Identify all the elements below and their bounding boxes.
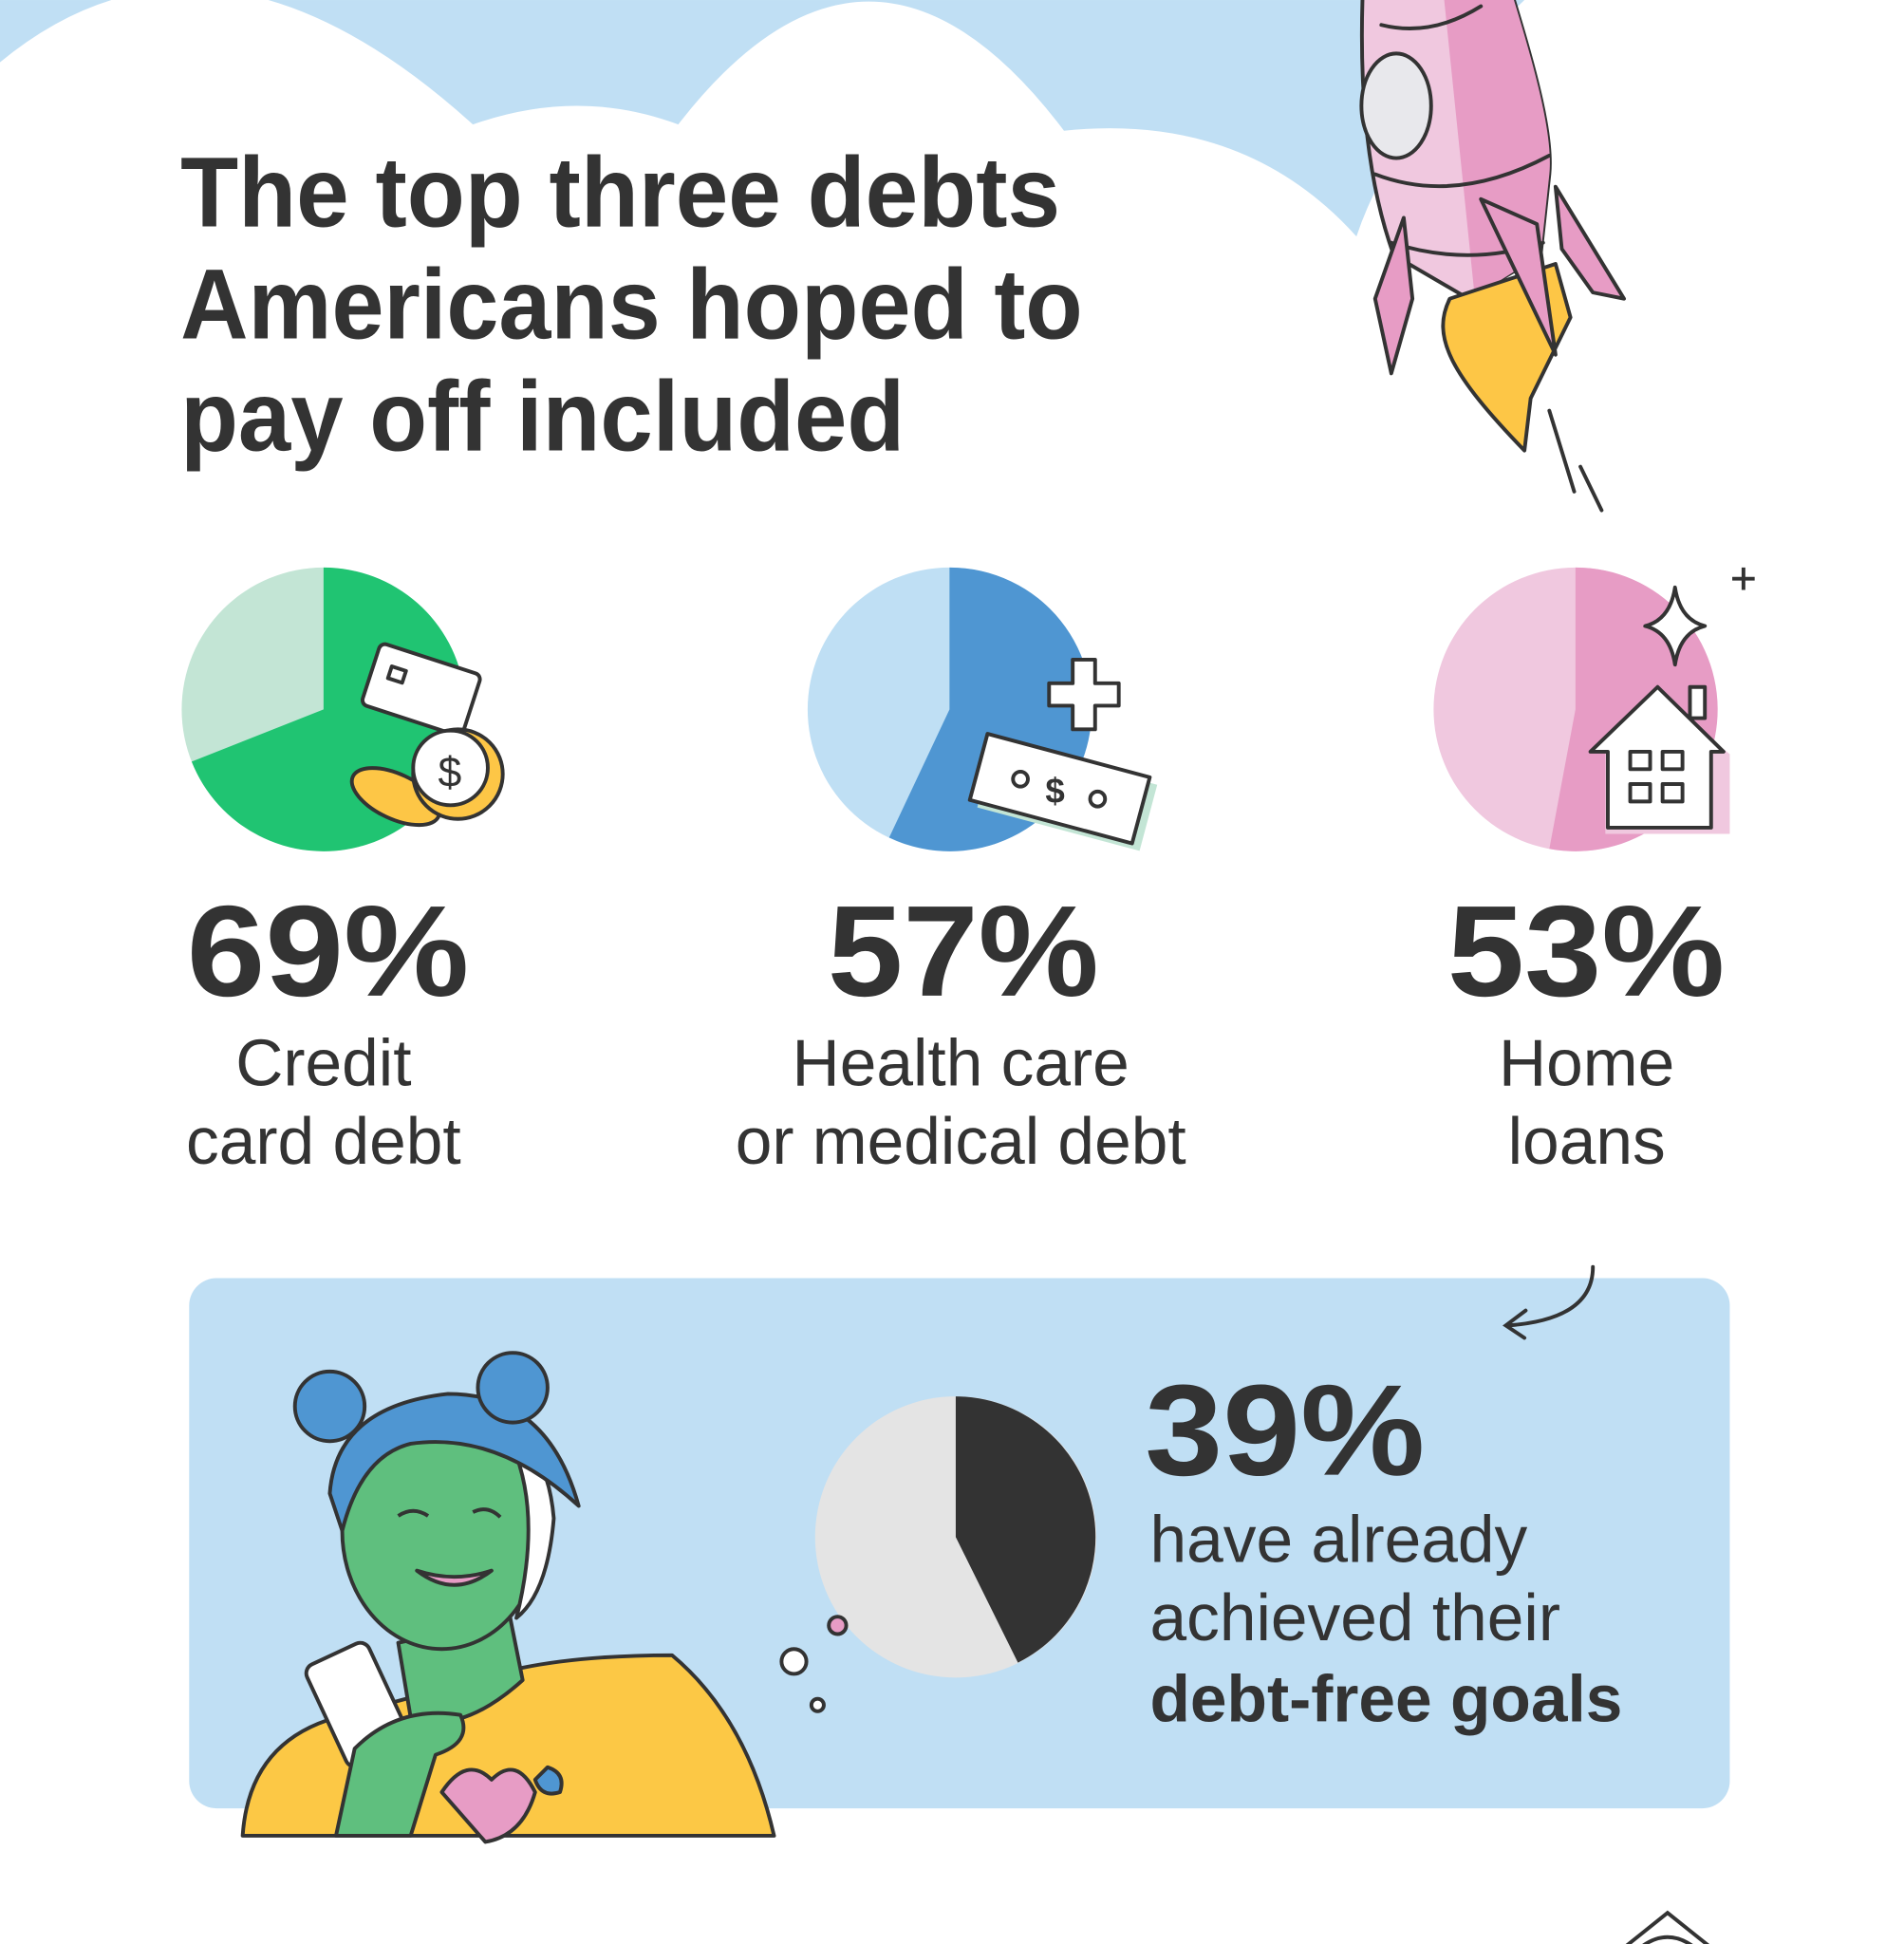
icon: plus and dollar bill: $ xyxy=(1045,772,1065,811)
text: achieved debt-free goals: have already xyxy=(1149,1502,1528,1576)
sky background xyxy=(0,0,1904,324)
icon: credit card and coins: $ xyxy=(439,750,462,796)
icon: credit card and coins xyxy=(344,643,503,837)
label: credit card debt xyxy=(186,1025,461,1178)
title: The top three debts xyxy=(180,138,1060,249)
panel: debt-free goals xyxy=(189,1267,1729,1841)
label: home loans: loans xyxy=(1508,1104,1666,1178)
panel: health care debt xyxy=(736,568,1186,1178)
arrow xyxy=(1505,1267,1593,1337)
text: achieved debt-free goals: achieved their xyxy=(1149,1580,1560,1654)
icon: house with sparkle xyxy=(1591,568,1755,833)
icon: plus and dollar bill xyxy=(970,660,1157,850)
panel: home loans xyxy=(1433,568,1755,1178)
label: home loans xyxy=(1499,1025,1674,1178)
blue box xyxy=(189,1279,1729,1808)
label: home loans: Home xyxy=(1499,1025,1674,1099)
icon: bottom logo xyxy=(1624,1913,1711,1944)
text: achieved debt-free goals xyxy=(1149,1502,1622,1735)
percentage 53%: 53% xyxy=(1447,879,1725,1023)
label: credit card debt: card debt xyxy=(186,1104,461,1178)
text: achieved debt-free goals: debt-free goals xyxy=(1149,1661,1622,1735)
label: health care debt xyxy=(736,1025,1186,1178)
rocket illustration xyxy=(1361,0,1624,511)
thought bubbles xyxy=(781,1617,847,1711)
title: Americans hoped to xyxy=(180,250,1083,361)
label: health care debt: or medical debt xyxy=(736,1104,1186,1178)
pie chart 57% xyxy=(808,568,1092,851)
panel: credit card debt xyxy=(181,568,503,1178)
title xyxy=(180,138,1083,473)
pie chart 39% xyxy=(815,1396,1096,1677)
percentage 57%: 57% xyxy=(828,879,1099,1023)
label: credit card debt: Credit xyxy=(235,1025,412,1099)
woman illustration xyxy=(243,1353,775,1841)
pie chart 69% xyxy=(181,568,465,851)
title: pay off included xyxy=(180,362,905,473)
percentage 39%: 39% xyxy=(1145,1358,1425,1503)
label: health care debt: Health care xyxy=(793,1025,1129,1099)
pie chart 53% xyxy=(1433,568,1718,851)
percentage 69%: 69% xyxy=(187,879,469,1023)
